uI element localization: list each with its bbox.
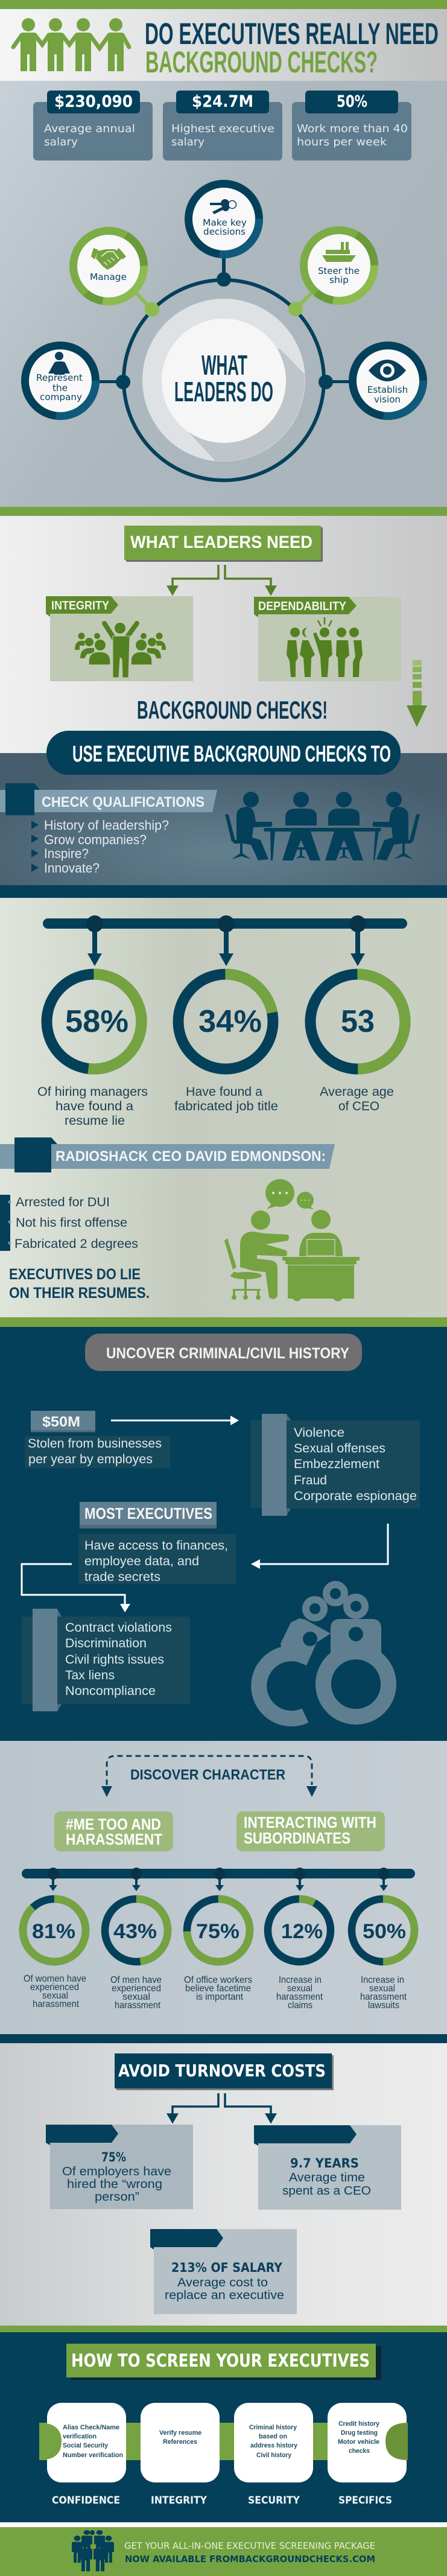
panel: most executives: MOST EXECUTIVES xyxy=(84,1504,212,1522)
donut chart: 12%: harassment xyxy=(276,1992,323,2002)
arrow: right to offenses xyxy=(111,1416,239,1425)
icon: meeting around a table xyxy=(225,792,420,860)
panel: most executives xyxy=(78,1502,236,1584)
section: footer xyxy=(0,2522,447,2576)
panel: 9.7 years: Average time xyxy=(289,2171,365,2184)
panel: integrity xyxy=(46,596,193,681)
panel: most executives: Have access to finances, xyxy=(84,1539,228,1553)
donut chart: 75%: 75% xyxy=(196,1920,239,1943)
list: qualification questions: Innovate? xyxy=(44,860,100,876)
stat: highest executive salary: salary xyxy=(171,136,204,148)
item: steer the ship: Steer the xyxy=(318,266,360,276)
banner: radioshack ceo xyxy=(0,1137,335,1172)
panel: violations list: Discrimination xyxy=(65,1636,147,1650)
stat: work more than 40 hours: Work more than 40 xyxy=(297,122,408,135)
donut chart: 12%: sexual xyxy=(287,1983,312,1994)
icon: group of five people xyxy=(287,617,363,677)
card: specifics xyxy=(328,2403,408,2507)
stat: average annual salary: $230,090 xyxy=(54,92,133,111)
icon: leader with raised arms and crowd xyxy=(75,623,166,678)
heading: how to screen your executives: HOW TO SCREEN YOUR EXECUTIVES xyxy=(71,2350,370,2371)
callout: executives do lie: EXECUTIVES DO LIE xyxy=(9,1266,141,1283)
panel: violations list: Tax liens xyxy=(65,1668,115,1682)
panel: 9.7 years: 9.7 YEARS xyxy=(290,2156,359,2171)
section: what leaders need xyxy=(0,507,447,753)
panel: most executives: trade secrets xyxy=(84,1570,160,1584)
list: david edmondson facts: Not his first offense xyxy=(16,1216,127,1230)
donut chart: 43%: experienced xyxy=(112,1983,161,1994)
panel: 75% of employers: person” xyxy=(95,2190,139,2204)
banner: check qualifications: CHECK QUALIFICATIONS xyxy=(42,794,204,810)
heading: background checks!: BACKGROUND CHECKS! xyxy=(137,696,328,724)
item: establish vision: Establish xyxy=(367,384,408,395)
stat: $50m stolen: $50M xyxy=(42,1414,80,1430)
section: resume lies xyxy=(0,898,447,1327)
card: security: SECURITY xyxy=(248,2495,300,2507)
panel: offenses list: Corporate espionage xyxy=(294,1489,417,1503)
item: steer the ship xyxy=(288,217,387,316)
donut chart: 43%: 43% xyxy=(113,1920,157,1943)
section: criminal and civil history xyxy=(0,1327,447,1741)
box: interacting with subordinates: SUBORDINATES xyxy=(244,1829,350,1847)
card: security xyxy=(234,2403,313,2507)
card: security: Criminal history xyxy=(249,2424,297,2431)
item: represent the company xyxy=(21,342,130,420)
timeline bar xyxy=(22,1868,415,1891)
diagram: what leaders do hub: WHAT xyxy=(201,349,247,381)
donut chart: 43% xyxy=(105,1899,168,2011)
donut chart: 34% xyxy=(174,974,278,1113)
diagram: what leaders do hub: LEADERS DO xyxy=(174,376,273,407)
panel: 75% of employers: 75% xyxy=(101,2150,126,2164)
panel: 213% of salary: 213% OF SALARY xyxy=(171,2260,283,2275)
arrow: offenses to most executives xyxy=(251,1524,388,1569)
panel: dependability: DEPENDABILITY xyxy=(258,600,347,613)
panel: most executives: employee data, and xyxy=(84,1554,199,1568)
box: me too and harassment: #ME TOO AND xyxy=(66,1815,161,1833)
icon: person xyxy=(48,352,70,375)
item: represent the company: company xyxy=(40,392,82,402)
stat: $50m stolen: Stolen from businesses xyxy=(28,1437,162,1451)
panel: integrity: INTEGRITY xyxy=(51,599,110,612)
donut chart: 50%: Increase in xyxy=(361,1975,404,1985)
card: integrity: Verify resume xyxy=(159,2429,201,2437)
pill: uncover criminal/civil history xyxy=(85,1334,362,1371)
arrow: down to background checks xyxy=(407,660,427,727)
list: david edmondson facts xyxy=(0,1195,138,1251)
section: use executive background checks xyxy=(0,731,447,898)
panel: violations list: Noncompliance xyxy=(65,1684,156,1698)
donut chart: 58%: resume lie xyxy=(65,1114,125,1128)
arrow: connector to both qualities xyxy=(168,565,275,594)
section: header xyxy=(0,0,447,81)
icon: eye xyxy=(369,360,406,381)
donut chart: 12%: 12% xyxy=(281,1920,323,1943)
arrow: connector to both stats xyxy=(168,2093,275,2122)
list: qualification questions: History of leadership? xyxy=(44,818,169,833)
arrow: dashed split xyxy=(101,1756,317,1797)
section: discover character xyxy=(0,1741,447,2043)
item: establish vision xyxy=(319,342,427,420)
donut chart: 81% xyxy=(23,1899,86,2009)
pill: uncover criminal/civil history: UNCOVER CRIMINAL/CIVIL HISTORY xyxy=(106,1345,349,1362)
panel: 9.7 years xyxy=(254,2125,401,2210)
section: what leaders do xyxy=(0,81,447,507)
icon: four people holding hands xyxy=(13,18,129,71)
donut chart: 34%: 34% xyxy=(198,1004,262,1039)
donut chart: 58%: 58% xyxy=(65,1004,128,1039)
box: me too and harassment: HARASSMENT xyxy=(66,1830,162,1848)
donut chart: 81%: sexual xyxy=(42,1991,68,2001)
section: avoid turnover costs xyxy=(0,2043,447,2326)
heading: how to screen your executives xyxy=(66,2344,381,2380)
card: specifics: checks xyxy=(349,2447,370,2455)
heading: what leaders need: WHAT LEADERS NEED xyxy=(130,533,312,552)
panel: offenses list xyxy=(251,1414,420,1516)
donut chart: 43%: harassment xyxy=(115,2000,161,2011)
panel: offenses list: Fraud xyxy=(294,1474,327,1487)
donut chart: 50%: lawsuits xyxy=(368,2000,399,2011)
panel: dependability xyxy=(254,597,401,681)
donut chart: 34%: fabricated job title xyxy=(174,1099,278,1113)
donut chart: 50%: 50% xyxy=(363,1920,406,1943)
list: qualification questions: Grow companies? xyxy=(44,832,147,847)
arrow: most executives to violations xyxy=(22,1564,130,1612)
panel: offenses list: Sexual offenses xyxy=(294,1442,385,1455)
card: security: Civil history xyxy=(256,2452,292,2459)
banner: check qualifications xyxy=(0,783,217,815)
donut chart: 50%: sexual xyxy=(369,1983,395,1994)
call to action xyxy=(124,2540,375,2565)
list: david edmondson facts: Fabricated 2 degrees xyxy=(14,1237,138,1251)
donut chart: 12%: Increase in xyxy=(279,1975,322,1985)
diagram: what leaders do hub xyxy=(124,280,324,480)
item: represent the company: Represent xyxy=(36,372,83,383)
item: make key decisions xyxy=(185,180,263,287)
heading: discover character: DISCOVER CHARACTER xyxy=(130,1767,285,1783)
card: confidence xyxy=(39,2403,126,2507)
card: specifics: Credit history xyxy=(338,2420,380,2428)
heading: what leaders need xyxy=(124,526,323,562)
panel: violations list: Civil rights issues xyxy=(65,1653,164,1667)
panel: 213% of salary xyxy=(150,2229,297,2314)
card: security: address history xyxy=(250,2442,298,2449)
panel: violations list xyxy=(22,1609,190,1711)
heading: avoid turnover costs: AVOID TURNOVER COSTS xyxy=(118,2061,326,2081)
panel: offenses list: Violence xyxy=(294,1426,344,1440)
connector strip xyxy=(39,2423,408,2460)
card: confidence: Number verification xyxy=(63,2452,123,2459)
item: steer the ship: ship xyxy=(329,275,349,285)
icon: ship xyxy=(322,242,356,262)
card: confidence: Social Security xyxy=(63,2442,109,2449)
stat: $50m stolen: per year by employes xyxy=(28,1452,153,1466)
item: make key decisions: Make key xyxy=(203,217,247,228)
donut chart: 53 average age xyxy=(310,974,405,1113)
donut chart: 34%: Have found a xyxy=(186,1085,262,1099)
panel: 213% of salary: Average cost to xyxy=(177,2276,268,2289)
stat: work more than 40 hours xyxy=(292,91,411,161)
title xyxy=(145,17,439,79)
item: represent the company: the xyxy=(52,383,68,393)
card: confidence: verification xyxy=(63,2433,97,2440)
donut chart: 43%: sexual xyxy=(122,1992,150,2002)
box: interacting with subordinates xyxy=(236,1811,385,1851)
donut chart: 58%: have found a xyxy=(55,1099,133,1113)
callout: executives do lie xyxy=(9,1266,150,1302)
donut chart: 75%: believe facetime xyxy=(185,1983,251,1994)
card: specifics: SPECIFICS xyxy=(338,2495,392,2507)
panel: 9.7 years: spent as a CEO xyxy=(282,2184,371,2198)
donut chart: 75%: Of office workers xyxy=(184,1975,252,1985)
icon: crowd of people xyxy=(72,2530,114,2571)
panel: 75% of employers: Of employers have xyxy=(62,2165,171,2178)
card: confidence: Alias Check/Name xyxy=(63,2424,119,2431)
donut chart: 81%: 81% xyxy=(32,1920,75,1943)
timeline bar xyxy=(43,915,407,966)
list: david edmondson facts: Arrested for DUI xyxy=(16,1195,110,1209)
item: establish vision: vision xyxy=(374,394,401,405)
panel: 75% of employers: hired the “wrong xyxy=(67,2178,162,2191)
list: qualification questions: Inspire? xyxy=(44,846,89,861)
stat: work more than 40 hours: 50% xyxy=(337,92,367,111)
donut chart: 81%: experienced xyxy=(30,1982,79,1992)
donut chart: 50% xyxy=(352,1899,414,2011)
donut chart: 58% xyxy=(37,974,148,1128)
stat: $50m stolen xyxy=(25,1411,170,1468)
donut chart: 53 average age: Average age xyxy=(320,1085,394,1099)
icon: handcuffs xyxy=(259,1585,388,1719)
panel: offenses list: Embezzlement xyxy=(294,1457,379,1471)
stat: highest executive salary: $24.7M xyxy=(192,92,253,111)
stat: average annual salary: Average annual xyxy=(44,122,135,135)
card: security: based on xyxy=(259,2433,287,2440)
icon: handshake xyxy=(91,248,126,270)
card: confidence: CONFIDENCE xyxy=(52,2495,120,2507)
card: integrity: References xyxy=(163,2438,197,2446)
callout: executives do lie: ON THEIR RESUMES. xyxy=(9,1285,150,1302)
stat: highest executive salary: Highest executive xyxy=(171,122,274,135)
card: specifics: Motor vehicle xyxy=(338,2438,379,2446)
list: qualification questions xyxy=(31,818,169,876)
banner: radioshack ceo: RADIOSHACK CEO DAVID EDMONDSON: xyxy=(55,1148,326,1165)
call to action: GET YOUR ALL-IN-ONE EXECUTIVE SCREENING PACKAGE xyxy=(124,2540,375,2551)
stat: average annual salary: salary xyxy=(44,136,78,148)
panel: 213% of salary: replace an executive xyxy=(165,2289,284,2302)
icon: job interview at a desk xyxy=(224,1179,360,1301)
donut chart: 81%: harassment xyxy=(33,1999,80,2009)
heading: avoid turnover costs xyxy=(115,2053,334,2090)
box: me too and harassment xyxy=(54,1811,173,1851)
item: manage: Manage xyxy=(90,272,127,282)
donut chart: 75%: is important xyxy=(196,1992,244,2002)
panel: violations list: Contract violations xyxy=(65,1621,172,1635)
donut chart: 50%: harassment xyxy=(360,1992,407,2002)
item: make key decisions: decisions xyxy=(203,226,246,237)
donut chart: 12% xyxy=(268,1899,331,2011)
donut chart: 53 average age: of CEO xyxy=(338,1099,379,1113)
stat: work more than 40 hours: hours per week xyxy=(297,136,387,148)
donut chart: 53 average age: 53 xyxy=(341,1004,375,1039)
donut chart: 75% xyxy=(184,1899,252,2002)
donut chart: 43%: Of men have xyxy=(110,1975,162,1985)
donut chart: 12%: claims xyxy=(288,2000,312,2011)
card: integrity: INTEGRITY xyxy=(151,2495,208,2507)
card: integrity xyxy=(141,2403,220,2507)
donut chart: 58%: Of hiring managers xyxy=(37,1085,148,1099)
section: how to screen your executives xyxy=(0,2326,447,2522)
item: manage xyxy=(60,218,159,317)
panel: 75% of employers xyxy=(46,2125,193,2209)
donut chart: 81%: Of women have xyxy=(24,1974,86,1984)
pill: use executive background checks to xyxy=(46,731,401,775)
box: interacting with subordinates: INTERACTING WITH xyxy=(244,1813,376,1831)
stat: average annual salary xyxy=(33,91,153,161)
icon: keys xyxy=(210,199,236,214)
call to action: NOW AVAILABLE FROMBACKGROUNDCHECKS.COM xyxy=(125,2554,375,2565)
stat: highest executive salary xyxy=(163,91,282,161)
card: specifics: Drug testing xyxy=(341,2429,378,2437)
